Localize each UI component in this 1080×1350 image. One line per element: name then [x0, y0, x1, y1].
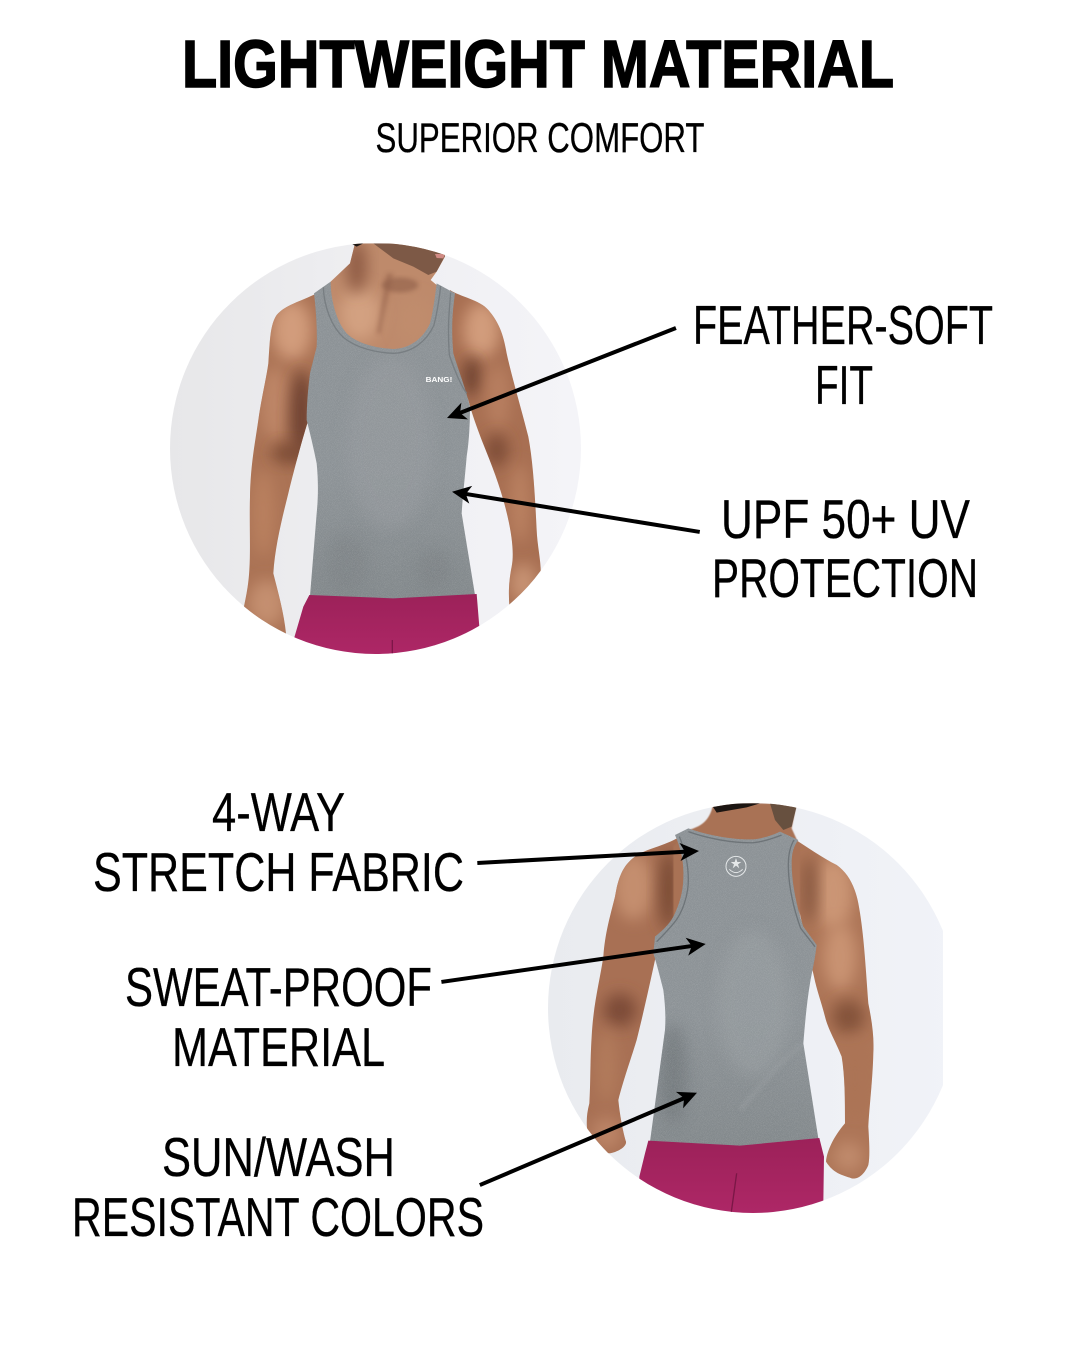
arrow: UPF protection: [451, 483, 701, 541]
arrow: sweat-proof: [440, 935, 707, 991]
front shorts: [294, 594, 480, 654]
logo: chest wordmark: BANG!: [426, 375, 452, 384]
label: UPF 50+ UV protection: PROTECTION: [712, 547, 978, 609]
neck and chest: [330, 243, 445, 349]
label: sweat-proof material: SWEAT-PROOF: [125, 956, 432, 1018]
label: sweat-proof material: [125, 956, 432, 1078]
label: feather-soft fit: FIT: [815, 354, 873, 416]
arrow: feather-soft fit: [444, 320, 679, 426]
label: UPF 50+ UV protection: UPF 50+ UV: [721, 488, 970, 550]
label: sun/wash resistant colors: RESISTANT COLORS: [72, 1186, 484, 1248]
title: LIGHTWEIGHT MATERIAL: [182, 27, 894, 102]
subtitle: SUPERIOR COMFORT: [376, 114, 704, 161]
right arm: [450, 290, 541, 605]
photo: tank top front view: [170, 240, 581, 663]
back shorts: [639, 1138, 824, 1213]
photo: tank top back view: [548, 803, 958, 1223]
neck and head back: [673, 803, 800, 918]
label: sun/wash resistant colors: [72, 1126, 484, 1248]
label: sweat-proof material: MATERIAL: [172, 1016, 385, 1078]
label: 4-way stretch fabric: STRETCH FABRIC: [93, 841, 464, 903]
label: 4-way stretch fabric: 4-WAY: [212, 781, 345, 843]
front tank body: [307, 282, 475, 599]
label: sun/wash resistant colors: SUN/WASH: [162, 1126, 395, 1188]
back right arm: [797, 841, 874, 1179]
label: 4-way stretch fabric: [93, 781, 464, 903]
label: feather-soft fit: [693, 294, 993, 416]
back tank body: [650, 828, 818, 1147]
label: UPF 50+ UV protection: [712, 488, 978, 609]
icon: smiley star logo: [726, 856, 746, 876]
arrow: sun/wash resistant: [476, 1084, 701, 1193]
arrow: 4-way stretch: [477, 842, 699, 872]
back left arm: [586, 838, 678, 1154]
left arm: [244, 294, 317, 634]
